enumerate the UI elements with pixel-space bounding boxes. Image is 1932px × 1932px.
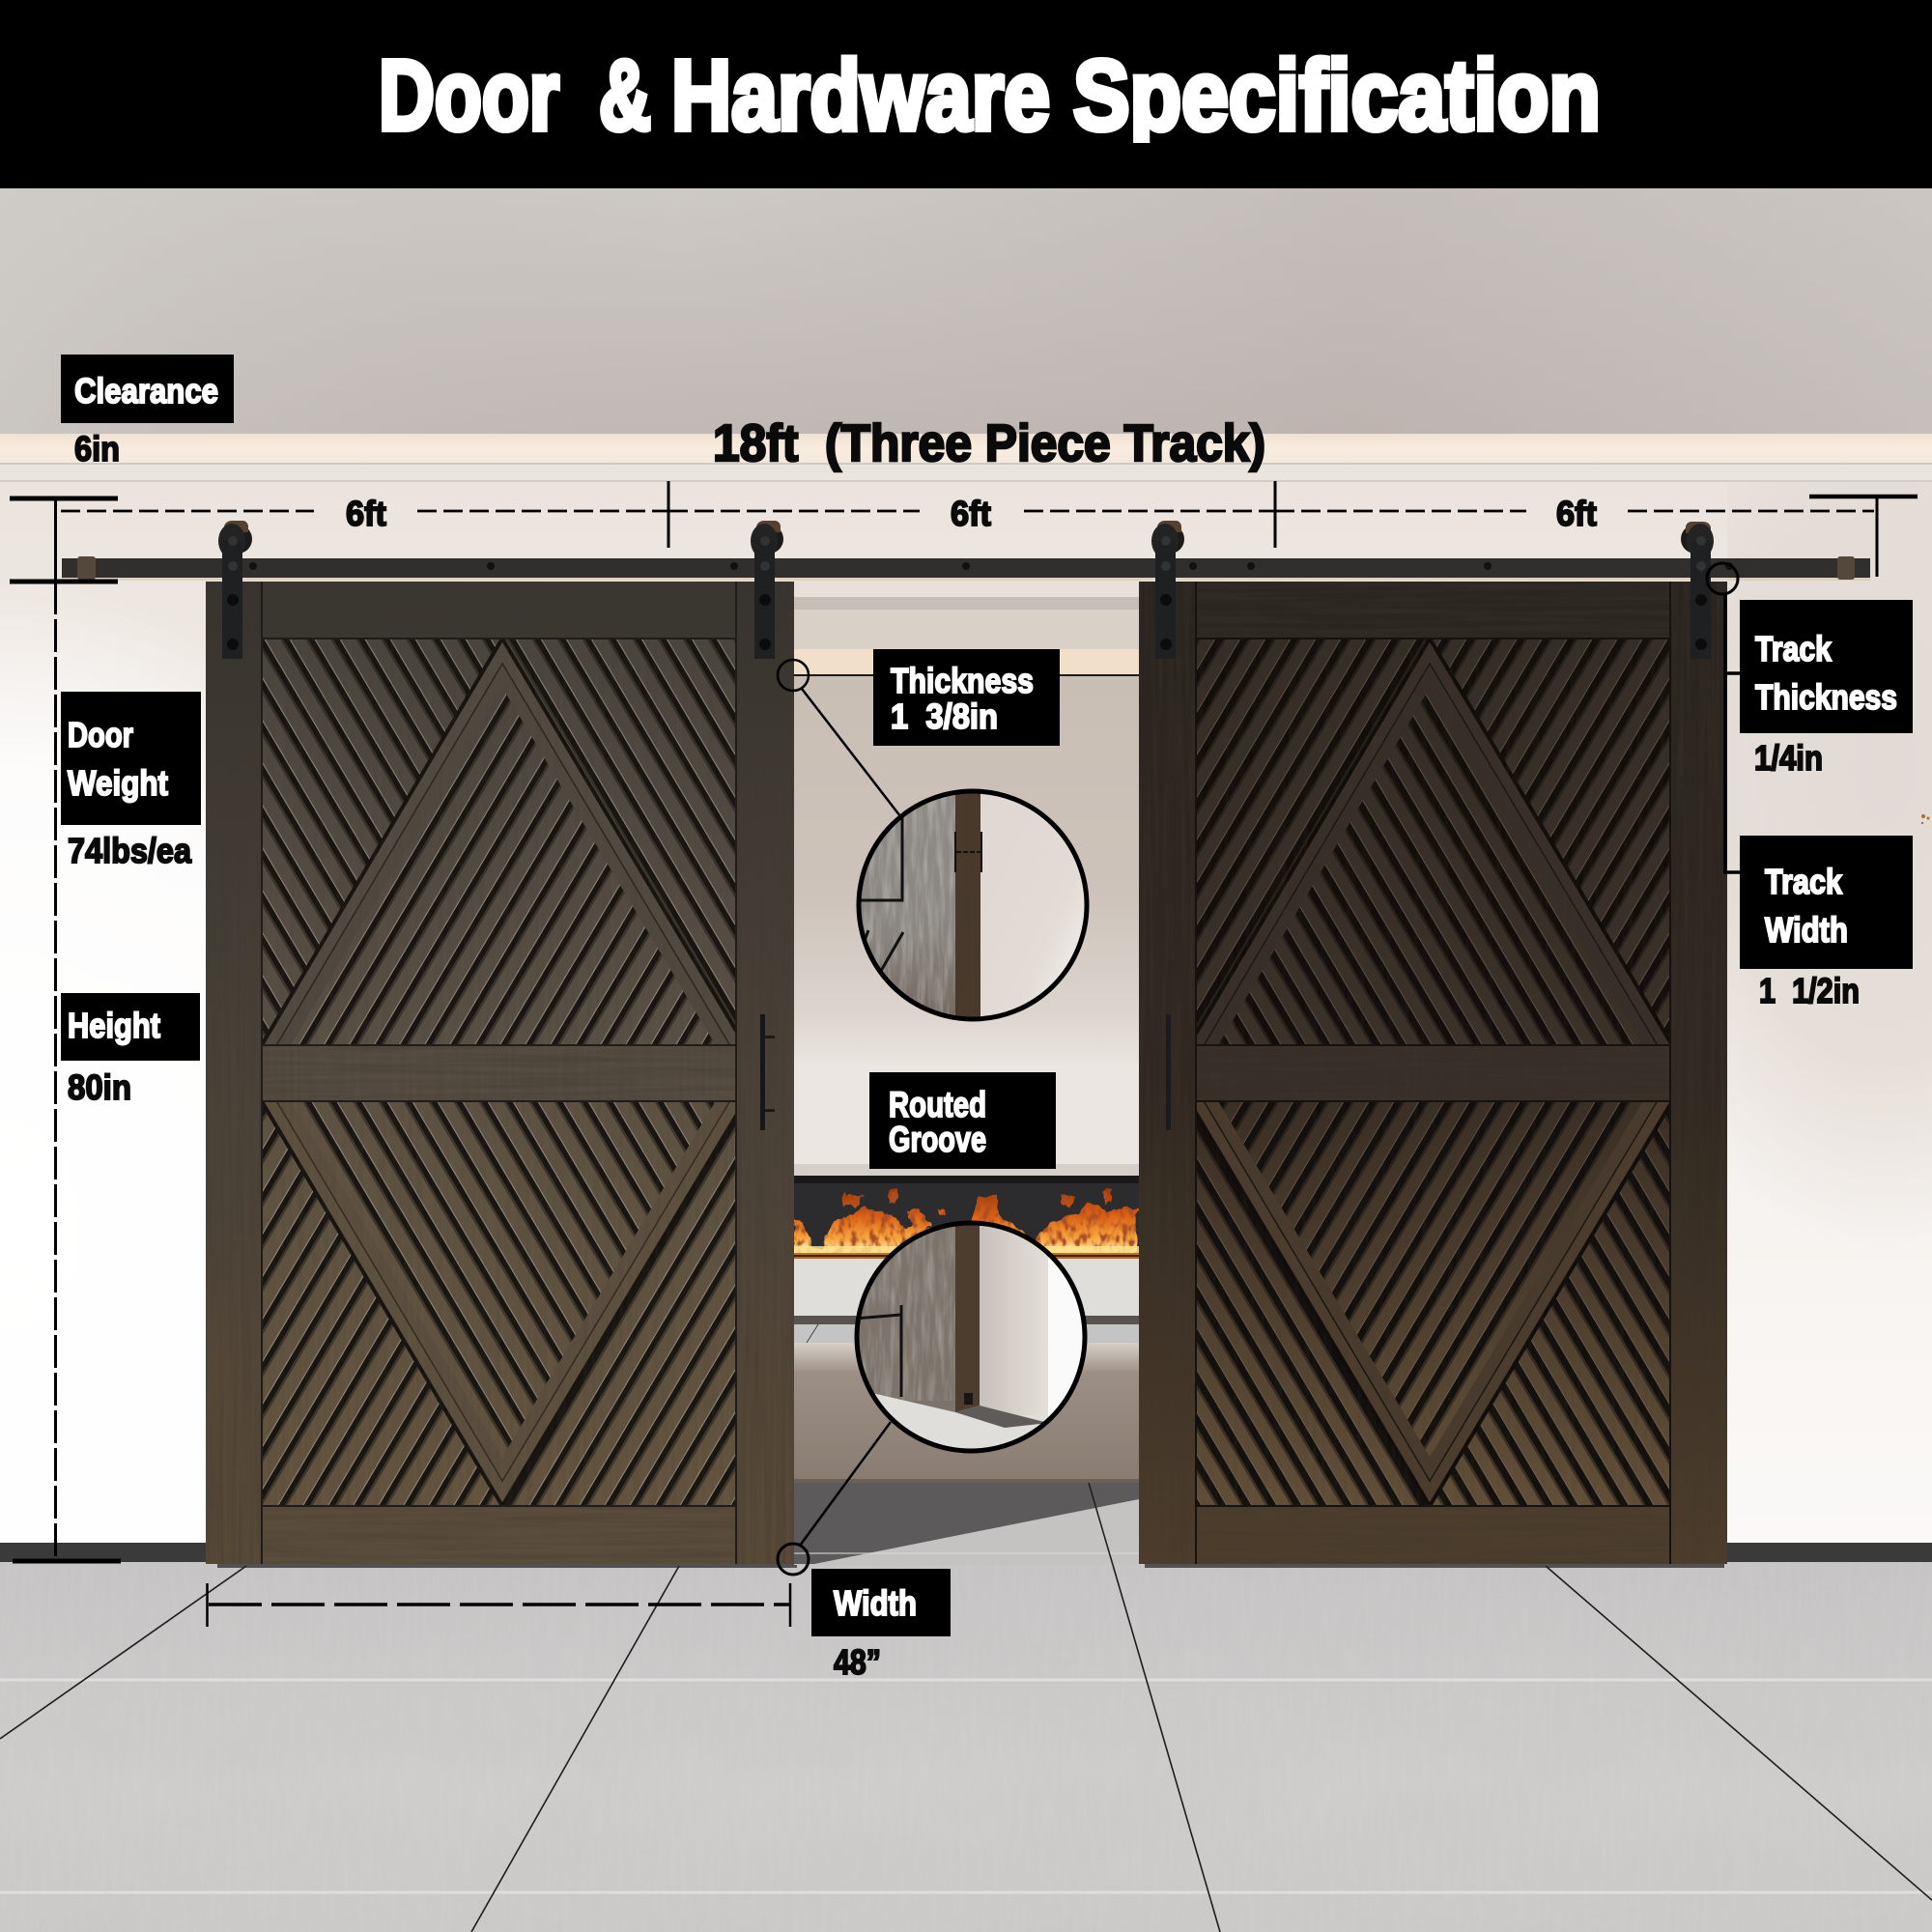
lower diagonal panel bbox=[263, 1102, 735, 1505]
callout: door weight: Weight bbox=[68, 763, 168, 803]
title text: Specification bbox=[1073, 40, 1601, 151]
callout: door weight: Door bbox=[68, 715, 133, 754]
bottom rail bbox=[262, 1506, 736, 1564]
upper diagonal panel bbox=[263, 639, 735, 1044]
title text: Door bbox=[379, 40, 559, 151]
callout: width: Width bbox=[834, 1583, 917, 1623]
floor bbox=[0, 1562, 1932, 1932]
sliding track rail bbox=[62, 556, 1870, 581]
middle rail bbox=[262, 1045, 736, 1101]
stray ember marks at right edge bbox=[1921, 814, 1930, 824]
fireplace bbox=[794, 1176, 1139, 1259]
callout: track width: 1 1/2in bbox=[1759, 971, 1860, 1010]
baseboard bbox=[0, 1543, 1932, 1562]
track end stops bbox=[77, 556, 1855, 580]
wall bbox=[0, 482, 1932, 1546]
callout: track thickness: Track bbox=[1755, 629, 1833, 668]
door width dimension line bbox=[207, 1583, 790, 1627]
left barn door bbox=[206, 582, 794, 1564]
callout: height: 80in bbox=[68, 1067, 131, 1107]
callout: door weight bbox=[61, 692, 201, 870]
thickness indicator circle bbox=[778, 660, 809, 691]
section labels bbox=[346, 494, 1597, 533]
callout: thickness: Thickness bbox=[891, 661, 1034, 700]
width indicator circle bbox=[778, 1544, 809, 1575]
upper diagonal panel bbox=[1197, 639, 1669, 1044]
track bolts bbox=[249, 562, 1733, 570]
ceiling bbox=[0, 188, 1932, 435]
cove light strip bbox=[0, 434, 1932, 464]
callout: routed groove bbox=[869, 1072, 1056, 1169]
callout: track thickness bbox=[1740, 600, 1913, 778]
title text: Hardware bbox=[671, 40, 1050, 151]
top rail bbox=[1196, 582, 1670, 639]
callout: thickness bbox=[873, 649, 1060, 746]
callout: width: 48” bbox=[834, 1642, 881, 1682]
lower diagonal panel bbox=[1197, 1102, 1669, 1505]
door handle bbox=[760, 1014, 775, 1130]
callout: width bbox=[811, 1569, 951, 1682]
track section dimension lines bbox=[61, 481, 1918, 577]
callout: track width bbox=[1740, 836, 1913, 1010]
callout: height bbox=[61, 993, 200, 1107]
track indicator circle bbox=[1707, 563, 1738, 594]
title text bbox=[382, 54, 1598, 143]
door handle bbox=[1166, 1014, 1171, 1130]
hanger 3 bbox=[1151, 521, 1184, 659]
callout lines and detail circles bbox=[778, 563, 1740, 1575]
flames bbox=[794, 1189, 1137, 1254]
callout: track width: Track bbox=[1765, 862, 1843, 901]
magnifier: door top edge detail bbox=[856, 788, 1090, 1022]
callout: track width: Width bbox=[1765, 910, 1848, 950]
callout: routed groove: Routed bbox=[889, 1085, 986, 1124]
title text: & bbox=[599, 40, 651, 151]
top rail bbox=[262, 582, 736, 639]
bottom rail bbox=[1196, 1506, 1670, 1564]
track length heading: 18ft (Three Piece Track) bbox=[713, 414, 1265, 472]
callout: routed groove: Groove bbox=[889, 1120, 986, 1159]
callout: door weight: 74lbs/ea bbox=[68, 831, 192, 870]
door height dimension line bbox=[10, 498, 121, 1561]
6ft left: 6ft bbox=[346, 494, 386, 533]
6ft middle: 6ft bbox=[951, 494, 991, 533]
callout: thickness: 1 3/8in bbox=[891, 696, 998, 736]
hanger 1 bbox=[218, 521, 252, 659]
callout: clearance: 6in bbox=[74, 429, 120, 469]
title banner bbox=[0, 0, 1932, 188]
callout: track thickness: Thickness bbox=[1755, 677, 1897, 717]
hanger 2 bbox=[751, 521, 783, 659]
hanger 4 bbox=[1681, 522, 1714, 659]
callout: clearance: Clearance bbox=[74, 371, 218, 411]
right barn door bbox=[1139, 582, 1727, 1564]
hanger straps and wheels bbox=[218, 521, 1714, 659]
middle rail bbox=[1196, 1045, 1670, 1101]
doorway opening scene bbox=[794, 580, 1139, 1565]
callout: track thickness: 1/4in bbox=[1754, 738, 1823, 778]
callout: clearance bbox=[61, 355, 234, 469]
magnifier: door bottom groove detail bbox=[855, 1217, 1087, 1459]
6ft right: 6ft bbox=[1556, 494, 1597, 533]
crown moulding bbox=[0, 463, 1932, 482]
callout: height: Height bbox=[68, 1006, 160, 1045]
